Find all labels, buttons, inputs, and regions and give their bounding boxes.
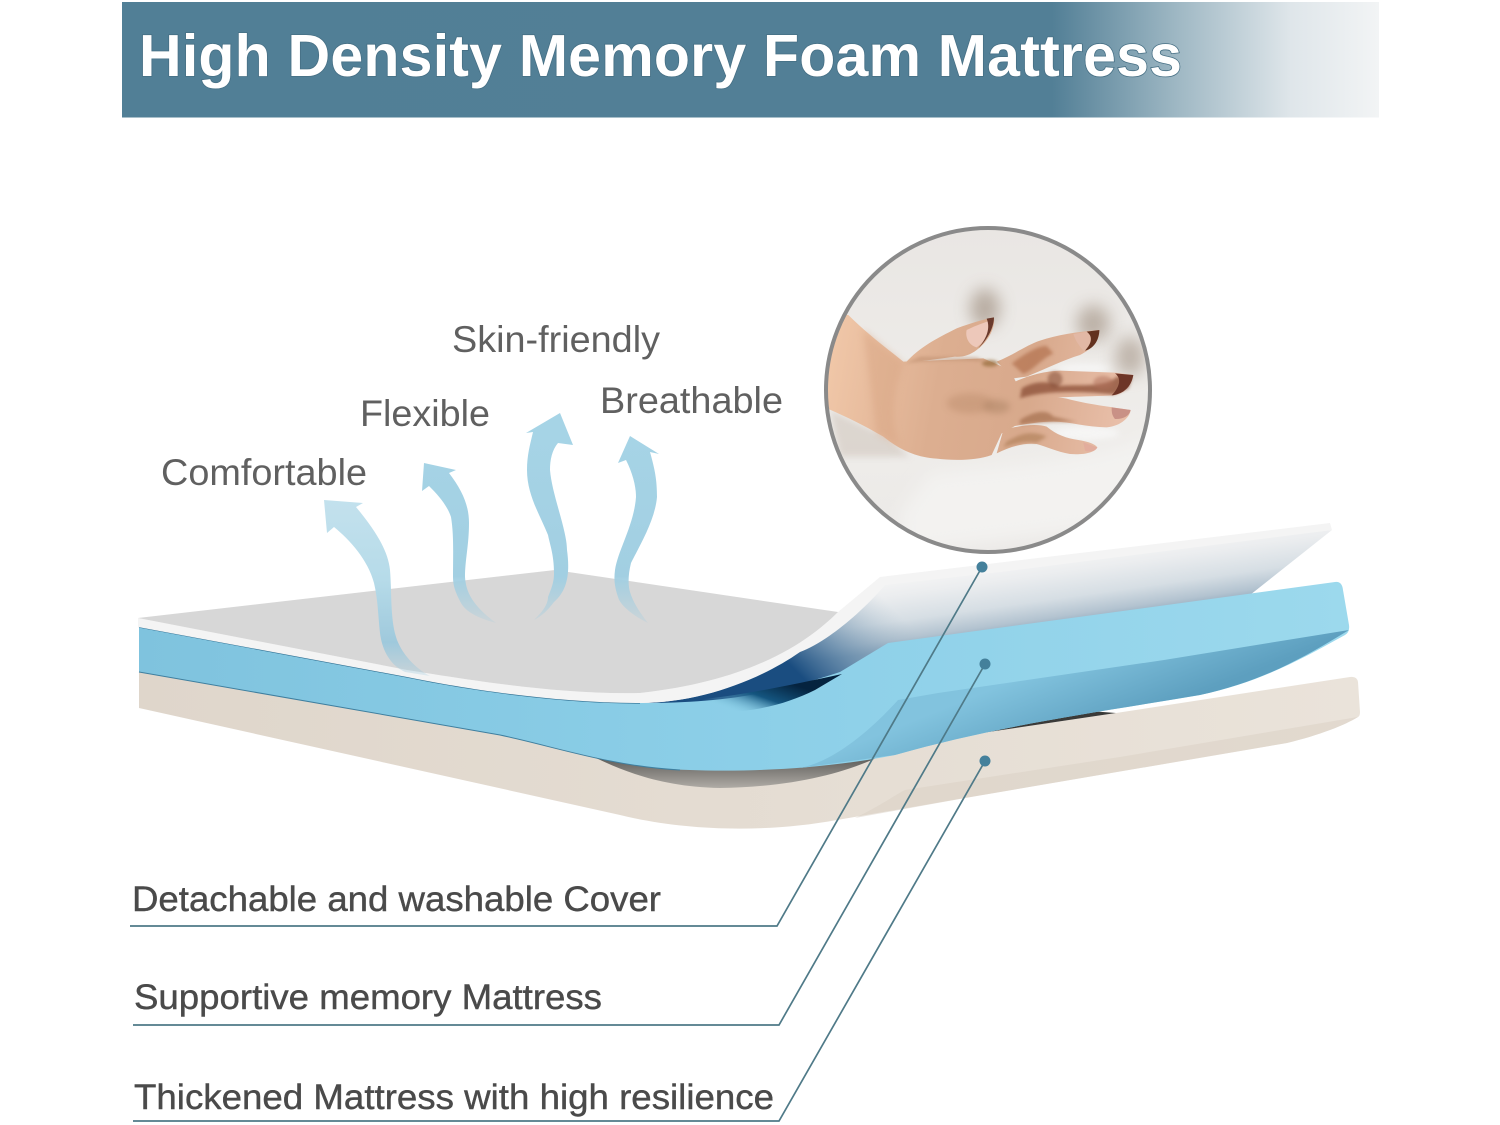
- label: cover: Detachable and washable Cover: [132, 880, 661, 919]
- label: Breathable: Breathable: [600, 380, 783, 421]
- label: Skin-friendly: Skin-friendly: [452, 319, 661, 360]
- label: base: Thickened Mattress with high resilience: [134, 1078, 774, 1117]
- title: High Density Memory Foam Mattress: [139, 23, 1182, 89]
- label: Flexible: Flexible: [360, 393, 490, 434]
- arrow 3: [526, 413, 573, 620]
- mattress layer: thick base (beige): [139, 672, 1360, 829]
- leader line: base: [133, 756, 990, 1121]
- cover underside (peeled back): [640, 530, 1332, 704]
- magnified circle: hand pressing foam: [817, 228, 1160, 553]
- title banner: [122, 2, 1379, 118]
- leader line: support: [133, 658, 990, 1025]
- breathable airflow arrows: [324, 413, 659, 676]
- arrow 1: [324, 500, 430, 676]
- arrow 4: [614, 436, 659, 623]
- leader line: cover: [130, 562, 988, 926]
- label: Comfortable: Comfortable: [161, 452, 367, 493]
- shadow under support layer: [590, 708, 1116, 788]
- arrow 2: [422, 463, 496, 623]
- label: support: Supportive memory Mattress: [134, 978, 602, 1017]
- hand: [817, 312, 1133, 460]
- mattress layer: support foam (blue): [139, 582, 1349, 771]
- cover sheet top (grey with white edge): [138, 523, 1332, 703]
